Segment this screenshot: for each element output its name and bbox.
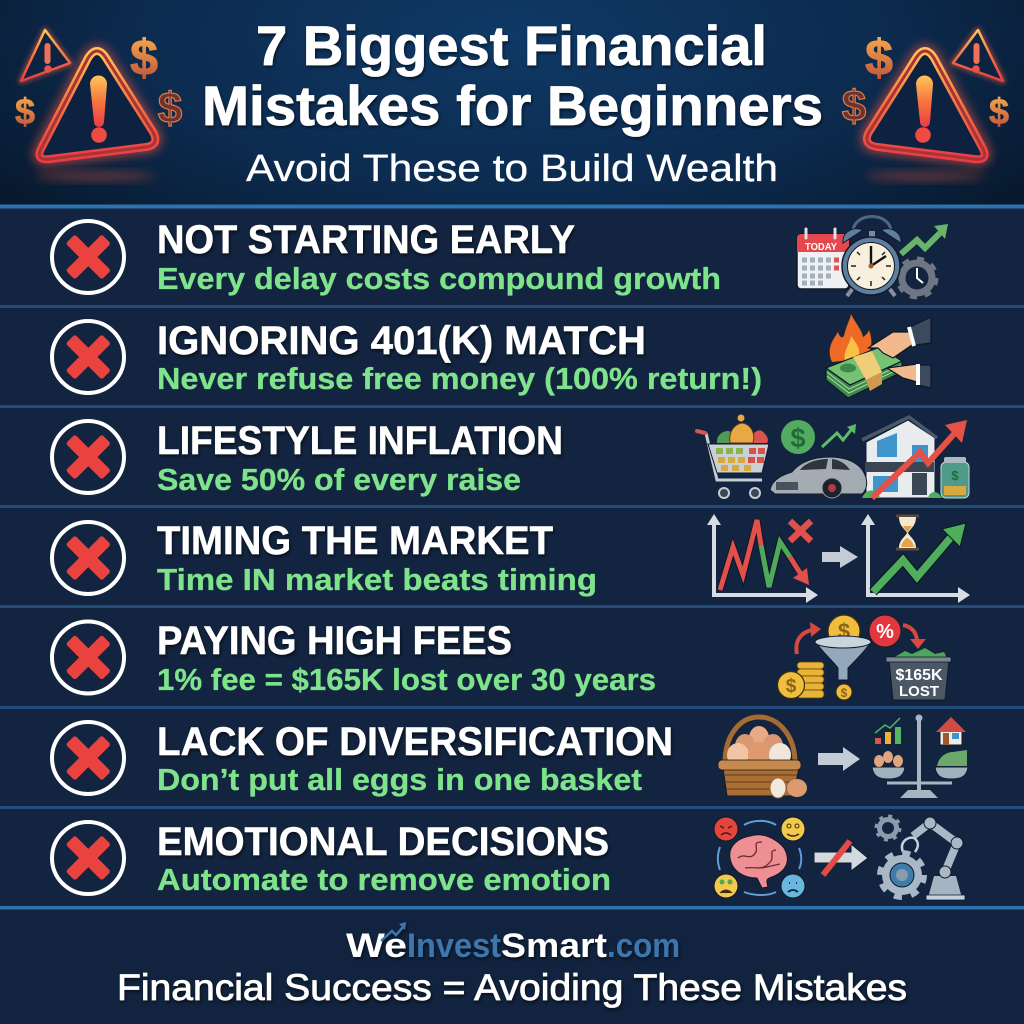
footer tagline: Financial Success = Avoiding These Mistakes — [117, 967, 907, 1008]
icon: x badge 7 — [52, 822, 124, 894]
icon: coins funnel fee bin — [778, 615, 951, 700]
icon: left warning cluster: $ — [15, 91, 35, 132]
footer logo: .com — [607, 927, 680, 965]
heading 5: PAYING HIGH FEES — [157, 619, 512, 663]
icon: calendar clock gear arrow — [797, 216, 948, 297]
text 2: Never refuse free money (100% return!) — [157, 361, 762, 396]
icon: right warning cluster — [842, 30, 1009, 181]
icon: x badge 4 — [52, 522, 124, 594]
icon: coins funnel fee bin: $ — [841, 686, 848, 700]
text 3: Save 50% of every raise — [157, 462, 521, 497]
heading 1: NOT STARTING EARLY — [157, 218, 575, 262]
row 6: lack of diversification — [52, 714, 968, 798]
heading 6: LACK OF DIVERSIFICATION — [157, 720, 673, 764]
heading 2: IGNORING 401(K) MATCH — [157, 319, 646, 363]
icon: x badge 2 — [52, 321, 124, 393]
text 1: Every delay costs compound growth — [157, 261, 721, 296]
row 5: paying high fees — [52, 615, 951, 700]
icon: left warning cluster — [15, 30, 182, 181]
row 4: timing the market — [52, 514, 970, 603]
header background — [0, 0, 1024, 205]
icon: coins funnel fee bin: $ — [786, 676, 797, 697]
rows background — [0, 205, 1024, 907]
footer logo: We — [346, 927, 407, 965]
row 3: lifestyle inflation — [52, 414, 969, 498]
icon: x badge 1 — [52, 221, 124, 293]
icon: cart car house arrow jar: $ — [951, 468, 959, 483]
heading 3: LIFESTYLE INFLATION — [157, 419, 563, 463]
text 6: Don’t put all eggs in one basket — [157, 762, 642, 797]
icon: brain emotions to robot automation — [714, 816, 965, 900]
icon: cart car house arrow jar — [697, 414, 969, 498]
icon: egg basket to balanced scale — [718, 714, 968, 798]
icon: coins funnel fee bin: $165K — [896, 667, 943, 684]
row 7: emotional decisions — [52, 816, 965, 900]
icon: left warning cluster: $ — [130, 30, 158, 86]
icon: burning money hands — [826, 314, 931, 398]
title: Mistakes for Beginners — [202, 74, 823, 137]
icon: calendar clock gear arrow: TODAY — [805, 241, 837, 253]
title — [202, 14, 823, 137]
icon: coins funnel fee bin: $ — [838, 619, 850, 644]
footer background — [0, 907, 1024, 1024]
icon: coins funnel fee bin: LOST — [899, 683, 939, 700]
row 1: not starting early — [52, 216, 948, 297]
icon: right warning cluster: $ — [842, 82, 866, 131]
icon: x badge 3 — [52, 421, 124, 493]
icon: coins funnel fee bin: % — [876, 621, 894, 643]
icon: x badge 5 — [52, 622, 124, 694]
text 7: Automate to remove emotion — [157, 862, 611, 897]
title: 7 Biggest Financial — [256, 14, 767, 77]
subtitle: Avoid These to Build Wealth — [246, 148, 778, 190]
footer logo — [346, 922, 680, 965]
footer logo: Smart — [501, 927, 607, 965]
heading 7: EMOTIONAL DECISIONS — [157, 820, 609, 864]
icon: right warning cluster: $ — [865, 30, 893, 86]
icon: right warning cluster: $ — [989, 91, 1009, 132]
icon: x badge 6 — [52, 722, 124, 794]
icon: volatile chart to steady growth — [707, 514, 970, 603]
footer logo: Invest — [407, 927, 501, 965]
icon: left warning cluster: $ — [158, 84, 182, 133]
heading 4: TIMING THE MARKET — [157, 519, 553, 563]
icon: cart car house arrow jar: $ — [790, 423, 806, 453]
text 4: Time IN market beats timing — [157, 562, 597, 597]
text 5: 1% fee = $165K lost over 30 years — [157, 662, 656, 697]
row 2: ignoring 401(k) match — [52, 314, 931, 398]
